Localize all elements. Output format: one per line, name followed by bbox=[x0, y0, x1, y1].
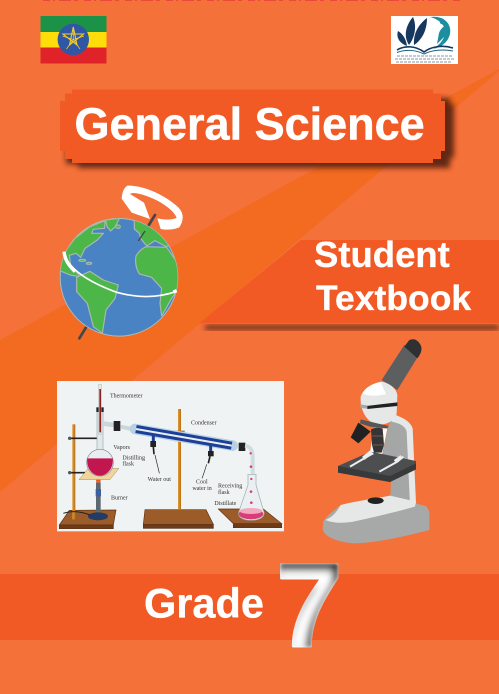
title banner bbox=[60, 90, 454, 168]
figure: distillation apparatus bbox=[57, 381, 284, 531]
diagram labels: Condenser bbox=[191, 420, 217, 426]
clipped header line bbox=[43, 0, 463, 1]
base bbox=[323, 497, 429, 543]
wooden stands bbox=[59, 509, 282, 529]
diagram labels bbox=[110, 394, 242, 507]
diagram labels: water in bbox=[192, 486, 212, 492]
diagonal wedge bbox=[0, 69, 499, 492]
condenser bbox=[135, 429, 233, 446]
objectives bbox=[351, 423, 371, 443]
grade band bbox=[0, 540, 499, 672]
icon: education bureau logo bbox=[391, 16, 458, 64]
grade number: 7 bbox=[276, 540, 342, 672]
head bbox=[361, 382, 397, 424]
title text: General Science bbox=[74, 98, 425, 150]
icon: rotating globe bbox=[58, 186, 183, 338]
student textbook text: Student bbox=[314, 234, 450, 275]
receiving adapter and flask bbox=[245, 446, 253, 475]
arm bbox=[382, 417, 416, 505]
diagram labels: Vapors bbox=[113, 445, 131, 451]
burner bbox=[96, 482, 101, 514]
icon: Ethiopian flag bbox=[40, 16, 106, 64]
diagram labels: Thermometer bbox=[110, 394, 143, 400]
banner: student textbook bbox=[199, 234, 499, 330]
student textbook text: Textbook bbox=[316, 278, 471, 318]
diagram labels: flask bbox=[122, 461, 134, 468]
grade label: Grade bbox=[144, 580, 264, 626]
diagram labels: Distillate bbox=[214, 501, 237, 507]
diagram labels: Cool bbox=[196, 480, 208, 486]
diagram labels: Distilling bbox=[122, 455, 145, 461]
stage bbox=[338, 452, 416, 482]
nosepiece bbox=[360, 419, 388, 428]
icon: microscope bbox=[323, 339, 429, 543]
diagram labels: Burner bbox=[111, 495, 128, 501]
distilling flask bbox=[97, 408, 103, 452]
diagram labels: Water out bbox=[148, 477, 171, 483]
diagram labels: Receiving bbox=[218, 484, 242, 490]
side arm bbox=[102, 423, 118, 426]
diagram labels: flask bbox=[218, 489, 230, 496]
student textbook text bbox=[314, 234, 471, 318]
